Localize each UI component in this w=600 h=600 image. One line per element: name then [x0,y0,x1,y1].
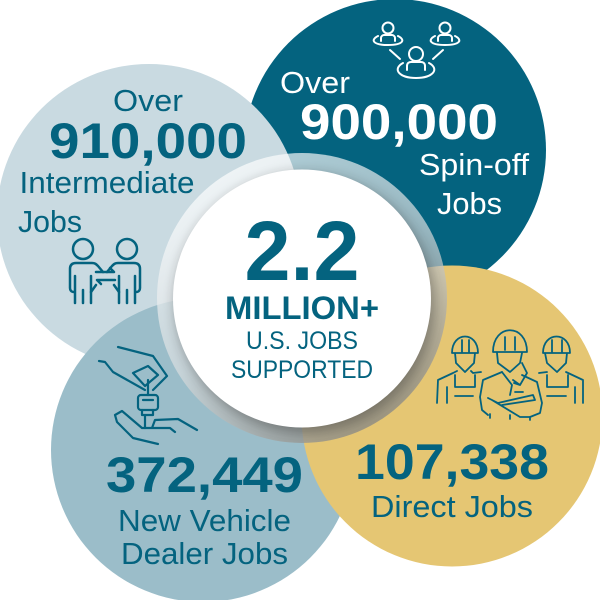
text: direct jobs: Direct Jobs [371,489,533,524]
panel: spin-off jobs circle [244,0,546,301]
text: new vehicle: New Vehicle [118,503,291,538]
stat: 900,000: 900,000 [300,94,498,150]
text: intermediate: Intermediate [20,165,194,200]
text: over (spin-off): Over [280,65,350,100]
text: U.S. jobs: U.S. JOBS [246,327,358,355]
icon: hand passing key to hand [99,347,197,444]
centre circle shadow [175,173,435,433]
icon: network of people [374,22,459,78]
text: dealer jobs: Dealer Jobs [121,536,288,571]
centre circle ring [157,153,447,443]
panel: intermediate jobs circle [0,64,301,368]
heading: 2.2: 2.2 [244,204,360,298]
stat: 372,449: 372,449 [106,447,303,503]
text: jobs (spin-off): Jobs [437,186,502,221]
panel: centre circle [173,170,431,428]
text: jobs (intermediate): Jobs [18,204,82,239]
text: spin-off: Spin-off [419,147,529,182]
panel: new vehicle dealer jobs circle [51,298,355,600]
stat: 107,338: 107,338 [355,434,549,490]
panel: direct jobs circle [302,266,600,566]
heading: million+: MILLION+ [225,290,379,326]
icon: two people exchanging [70,239,140,303]
stat: 910,000: 910,000 [49,113,247,169]
icon: three construction workers [437,330,583,420]
text: over (intermediate): Over [113,83,183,118]
text: supported: SUPPORTED [231,356,373,384]
